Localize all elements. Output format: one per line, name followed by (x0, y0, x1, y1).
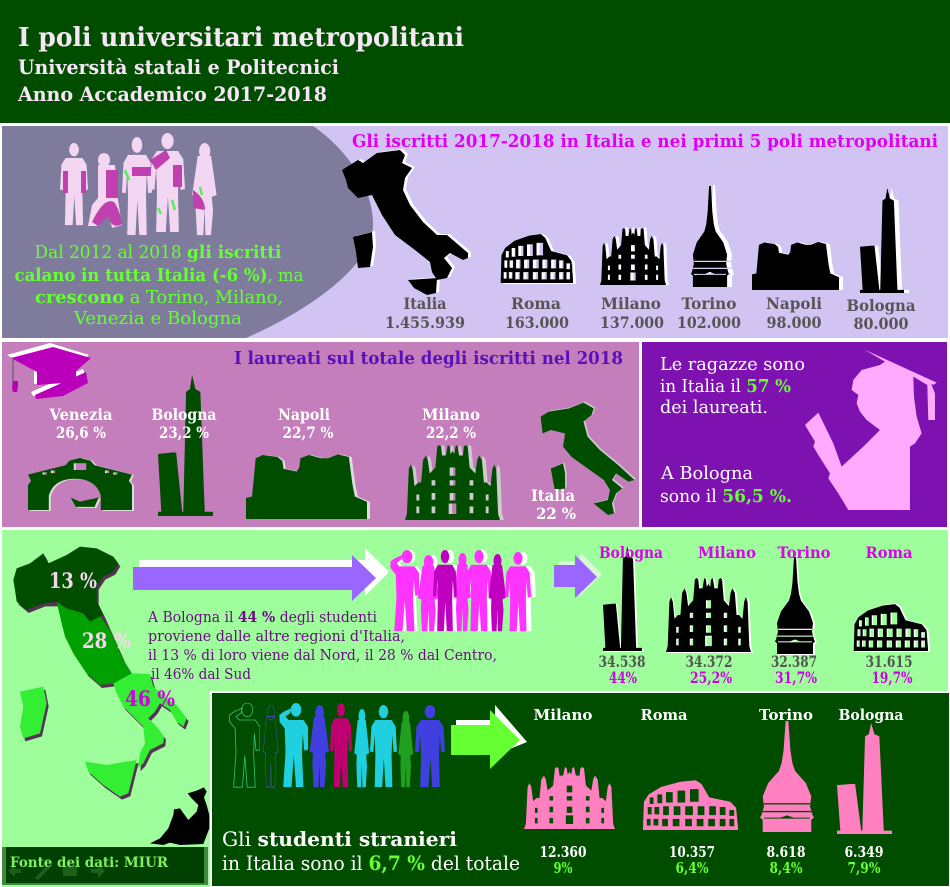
city labels: graduates: 23,2 % (159, 423, 209, 442)
city labels: graduates: Bologna (152, 405, 216, 424)
icon: Rialto bridge (28, 458, 134, 511)
city labels: enrolled: 102.000 (677, 313, 741, 332)
text: origin of students: A Bologna il 44 % degli studenti (147, 608, 377, 626)
arrow: green (451, 705, 527, 769)
city labels: enrolled: Bologna (846, 296, 916, 315)
city labels: regional students: 31,7% (775, 668, 817, 687)
city labels: foreign students: Torino (759, 706, 813, 724)
city labels: enrolled: 1.455.939 (385, 313, 465, 332)
icon: Mole (691, 185, 734, 287)
subtitle: Università statali e Politecnici (18, 55, 339, 79)
city labels: enrolled: Roma (511, 294, 561, 313)
city labels: graduates: Venezia (49, 405, 112, 424)
city labels: regional students: Roma (866, 543, 912, 562)
city labels: enrolled: 137.000 (600, 313, 664, 332)
text: origin of students: il 46% dal Sud (151, 665, 251, 683)
city labels: graduates: Milano (422, 405, 480, 424)
illustration: graduate girl (805, 349, 937, 510)
icon: group of students (60, 133, 217, 235)
city labels: enrolled: 98.000 (766, 313, 822, 332)
city labels: enrolled (385, 294, 916, 333)
icon: castle green (246, 454, 370, 519)
icon: graduation cap (7, 343, 91, 399)
text: origin of students: il 13 % di loro viene dal Nord, il 28 % dal Centro, (148, 646, 497, 664)
city labels: enrolled: Italia (404, 294, 446, 313)
city labels: foreign students: Bologna (838, 706, 904, 724)
city labels: regional students: Bologna (599, 543, 663, 562)
icon: magenta student group (390, 550, 536, 631)
map: Italia green (541, 402, 636, 515)
source box: Fonte dei dati: MIUR (10, 855, 168, 871)
panel: students from other regions (2, 530, 948, 887)
city labels: regional students: 25,2% (690, 668, 732, 687)
city labels: foreign students: 10.357 (669, 843, 715, 861)
icon: Duomo green (405, 445, 504, 520)
city labels: regional students: 34.538 (598, 652, 646, 671)
map: Italia black (342, 149, 471, 295)
text: origin of students (147, 608, 497, 683)
callout: enrolment trend: Dal 2012 al 2018 gli iscritti (34, 242, 282, 263)
callout: women share: sono il 56,5 %. (660, 486, 792, 507)
panel: women graduates (642, 342, 947, 527)
text: origin of students: proviene dalle altre regioni d'Italia, (148, 627, 405, 645)
city labels: graduates: 22,2 % (426, 423, 476, 442)
icon: towers pink (837, 723, 892, 834)
callout: women share: A Bologna (660, 463, 753, 484)
callout: women share: in Italia il 57 % (660, 376, 791, 397)
label: Centre share: 28 % (82, 628, 131, 653)
city labels: enrolled: 80.000 (854, 314, 909, 333)
city labels: graduates: 26,6 % (56, 423, 106, 442)
callout: enrolment trend: Venezia e Bologna (73, 308, 242, 329)
panel: enrolled students (2, 126, 948, 338)
city labels: graduates (49, 405, 576, 523)
callout: enrolment trend: crescono a Torino, Milano, (35, 287, 283, 308)
city labels: graduates: 22 % (536, 504, 576, 523)
city labels: foreign students: 9% (554, 859, 572, 877)
label: North share: 13 % (49, 568, 97, 593)
city labels: foreign students: 6,4% (676, 859, 708, 877)
city labels: regional students: Milano (698, 543, 756, 562)
city labels: regional students: 19,7% (872, 668, 913, 687)
panel: foreign students (211, 692, 950, 887)
city labels: enrolled: Milano (601, 294, 661, 313)
icon: towers black (603, 546, 644, 652)
section heading: graduates: I laureati sul totale degli iscritti nel 2018 (234, 348, 623, 369)
icon: Colosseo black (854, 603, 930, 652)
icon: Colosseo (501, 234, 576, 284)
callout: enrolment trend (14, 242, 304, 329)
source box (2, 847, 208, 885)
city labels: graduates: 22,7 % (282, 423, 334, 442)
panel: header (0, 0, 950, 123)
icon: Duomo black (666, 578, 753, 653)
city labels: graduates: Italia (531, 486, 575, 505)
text: foreign students: in Italia sono il 6,7 % del totale (222, 851, 520, 875)
callout: enrolment trend: calano in tutta Italia (-6 %), ma (14, 265, 304, 286)
city labels: foreign students (534, 706, 904, 877)
arrow: violet long (133, 548, 389, 601)
city labels: regional students: 32.387 (771, 652, 817, 671)
city labels: enrolled: 163.000 (505, 313, 569, 332)
city labels: regional students (598, 543, 913, 687)
text: foreign students (222, 827, 520, 875)
city labels: regional students: 34.372 (686, 652, 732, 671)
icon: multicolour student group (230, 703, 445, 787)
city labels: foreign students: 12.360 (540, 843, 586, 861)
icon: castle (752, 242, 843, 290)
city labels: regional students: 31.615 (866, 652, 912, 671)
icon: Duomo (600, 227, 669, 285)
icon: Mole black (775, 557, 817, 655)
city labels: regional students: 44% (609, 668, 637, 687)
text: foreign students: Gli studenti stranieri (222, 827, 457, 851)
city labels: foreign students: 6.349 (844, 843, 884, 861)
panel: graduates (2, 342, 639, 527)
city labels: enrolled: Torino (682, 294, 736, 313)
label: South share: 46 % (125, 686, 175, 711)
city labels: enrolled: Napoli (766, 294, 822, 313)
arrow: violet short (554, 552, 602, 598)
map: Italy by area (13, 547, 189, 800)
city labels: foreign students: Milano (534, 706, 592, 724)
city labels: regional students: Torino (778, 543, 830, 562)
icon: towers green (158, 375, 213, 516)
illustration: reading girl (150, 787, 209, 845)
icon: towers (860, 188, 909, 293)
city labels: foreign students: 7,9% (848, 859, 880, 877)
city labels: graduates: Napoli (278, 405, 330, 424)
callout: women share: dei laureati. (660, 397, 768, 418)
icon: Duomo pink (524, 767, 615, 829)
callout: women share (660, 354, 805, 507)
icon: Mole pink (760, 721, 814, 832)
callout: women share: Le ragazze sono (660, 354, 805, 375)
title: I poli universitari metropolitani (18, 23, 464, 53)
icon: Colosseo pink (643, 780, 738, 830)
academic year: Anno Accademico 2017-2018 (17, 82, 327, 106)
city labels: foreign students: Roma (640, 706, 688, 724)
city labels: foreign students: 8.618 (766, 843, 806, 861)
city labels: foreign students: 8,4% (770, 859, 802, 877)
